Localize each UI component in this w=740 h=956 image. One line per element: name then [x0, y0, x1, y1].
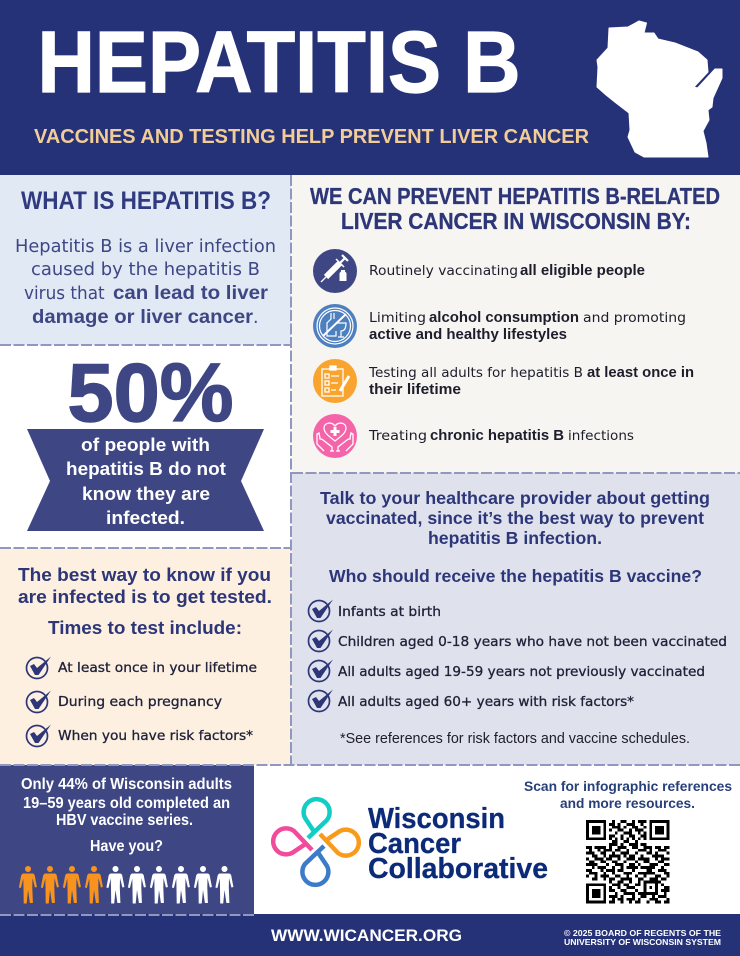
panel: footer — [0, 914, 740, 956]
icon: collaborative knot logo — [273, 799, 359, 885]
ribbon text: of people with — [81, 435, 210, 455]
text block: caused by the hepatitis B — [31, 260, 260, 280]
text: alcohol: and promoting — [583, 311, 686, 326]
panel: vaccination rate — [0, 765, 254, 915]
list: who should be vaccinated: Infants at birth — [338, 604, 441, 620]
icon: Wisconsin map — [597, 21, 722, 157]
text block: . — [253, 308, 259, 328]
list: who should be vaccinated: Children aged 0-18 years who have not been vaccinated — [338, 634, 727, 650]
callout text: Talk to your healthcare provider about getting — [320, 488, 710, 508]
text: alcohol: Limiting — [369, 311, 426, 326]
heading: The best way to know if you — [18, 564, 271, 585]
scan text: and more resources. — [560, 795, 695, 811]
text block: Have you? — [90, 838, 163, 855]
heading — [18, 564, 272, 638]
panel: testing — [0, 548, 291, 765]
title: HEPATITIS B — [38, 14, 520, 111]
callout text: vaccinated, since it’s the best way to prevent — [326, 508, 704, 528]
logo wordmark — [368, 803, 548, 885]
text: vaccinating — [369, 263, 645, 279]
website: WWW.WICANCER.ORG — [271, 926, 462, 945]
panel: prevention — [292, 175, 740, 473]
heading: are infected is to get tested. — [18, 586, 272, 607]
copyright: UNIVERSITY OF WISCONSIN SYSTEM — [564, 937, 721, 947]
callout text: hepatitis B infection. — [428, 528, 602, 548]
list: who should be vaccinated: All adults aged 19-59 years not previously vaccinated — [338, 664, 705, 680]
icon: no alcohol — [313, 304, 357, 348]
text: alcohol — [369, 310, 686, 343]
list: times to test — [26, 656, 257, 746]
ribbon text: infected. — [106, 508, 185, 528]
text: alcohol: active and healthy lifestyles — [369, 327, 567, 343]
text block: Hepatitis B is a liver infection — [15, 237, 276, 257]
pictogram: 4 of 10 people — [19, 866, 233, 904]
scan text: Scan for infographic references — [524, 778, 732, 794]
list: who should be vaccinated — [308, 600, 727, 712]
icon: clipboard — [313, 359, 357, 403]
text block: can lead to liver — [113, 282, 268, 304]
list: who should be vaccinated: All adults aged 60+ years with risk factors* — [338, 694, 634, 710]
logo wordmark: Cancer — [368, 828, 461, 860]
panel: header — [0, 0, 740, 175]
icon: syringe — [313, 249, 357, 293]
copyright: © 2025 BOARD OF REGENTS OF THE — [564, 928, 721, 938]
text: testing: at least once in — [587, 365, 694, 381]
panel: vaccine recommendations — [292, 473, 740, 765]
text: vaccinating: all eligible people — [520, 263, 645, 279]
text: treating: chronic hepatitis B — [430, 428, 564, 444]
text: treating: Treating — [368, 429, 427, 444]
ribbon text — [66, 435, 226, 528]
text block: virus that — [24, 284, 110, 304]
text: treating: infections — [568, 429, 634, 444]
logo wordmark: Collaborative — [368, 853, 548, 885]
text: testing — [368, 365, 694, 398]
text block — [21, 776, 232, 855]
scan text — [524, 778, 732, 811]
subtitle: VACCINES AND TESTING HELP PREVENT LIVER CANCER — [34, 126, 590, 148]
text: alcohol: alcohol consumption — [429, 310, 579, 326]
callout text — [320, 488, 710, 586]
ribbon text: know they are — [82, 484, 210, 504]
icon: heart and hands — [313, 414, 357, 458]
big number: 50% — [68, 346, 234, 439]
panel: what is hepatitis B — [0, 175, 291, 345]
panel: 50 percent statistic — [0, 345, 291, 548]
text: testing: their lifetime — [369, 382, 461, 398]
text block: damage or liver cancer — [32, 306, 253, 328]
QR code — [586, 821, 670, 902]
panel: logo and QR — [254, 765, 740, 914]
text: vaccinating: Routinely vaccinating — [369, 264, 518, 279]
logo wordmark: Wisconsin — [368, 803, 505, 835]
callout text: Who should receive the hepatitis B vaccine? — [329, 566, 702, 586]
ribbon text: hepatitis B do not — [66, 459, 226, 479]
list: times to test: At least once in your lifetime — [58, 660, 257, 676]
text block — [15, 237, 276, 328]
text block: 19–59 years old completed an — [23, 795, 230, 812]
list: times to test: During each pregnancy — [58, 694, 222, 710]
panel: prevention: LIVER CANCER IN WISCONSIN BY: — [341, 208, 691, 234]
text: testing: Testing all adults for hepatitis B — [368, 366, 583, 381]
list: times to test: When you have risk factors* — [58, 728, 253, 744]
text block: HBV vaccine series. — [56, 812, 193, 829]
ribbon — [27, 429, 264, 531]
copyright — [564, 928, 721, 947]
text: treating — [368, 428, 634, 444]
footnote: *See references for risk factors and vaccine schedules. — [340, 730, 690, 747]
text block: Only 44% of Wisconsin adults — [21, 776, 232, 793]
heading: Times to test include: — [48, 617, 242, 638]
heading: WHAT IS HEPATITIS B? — [21, 187, 271, 215]
